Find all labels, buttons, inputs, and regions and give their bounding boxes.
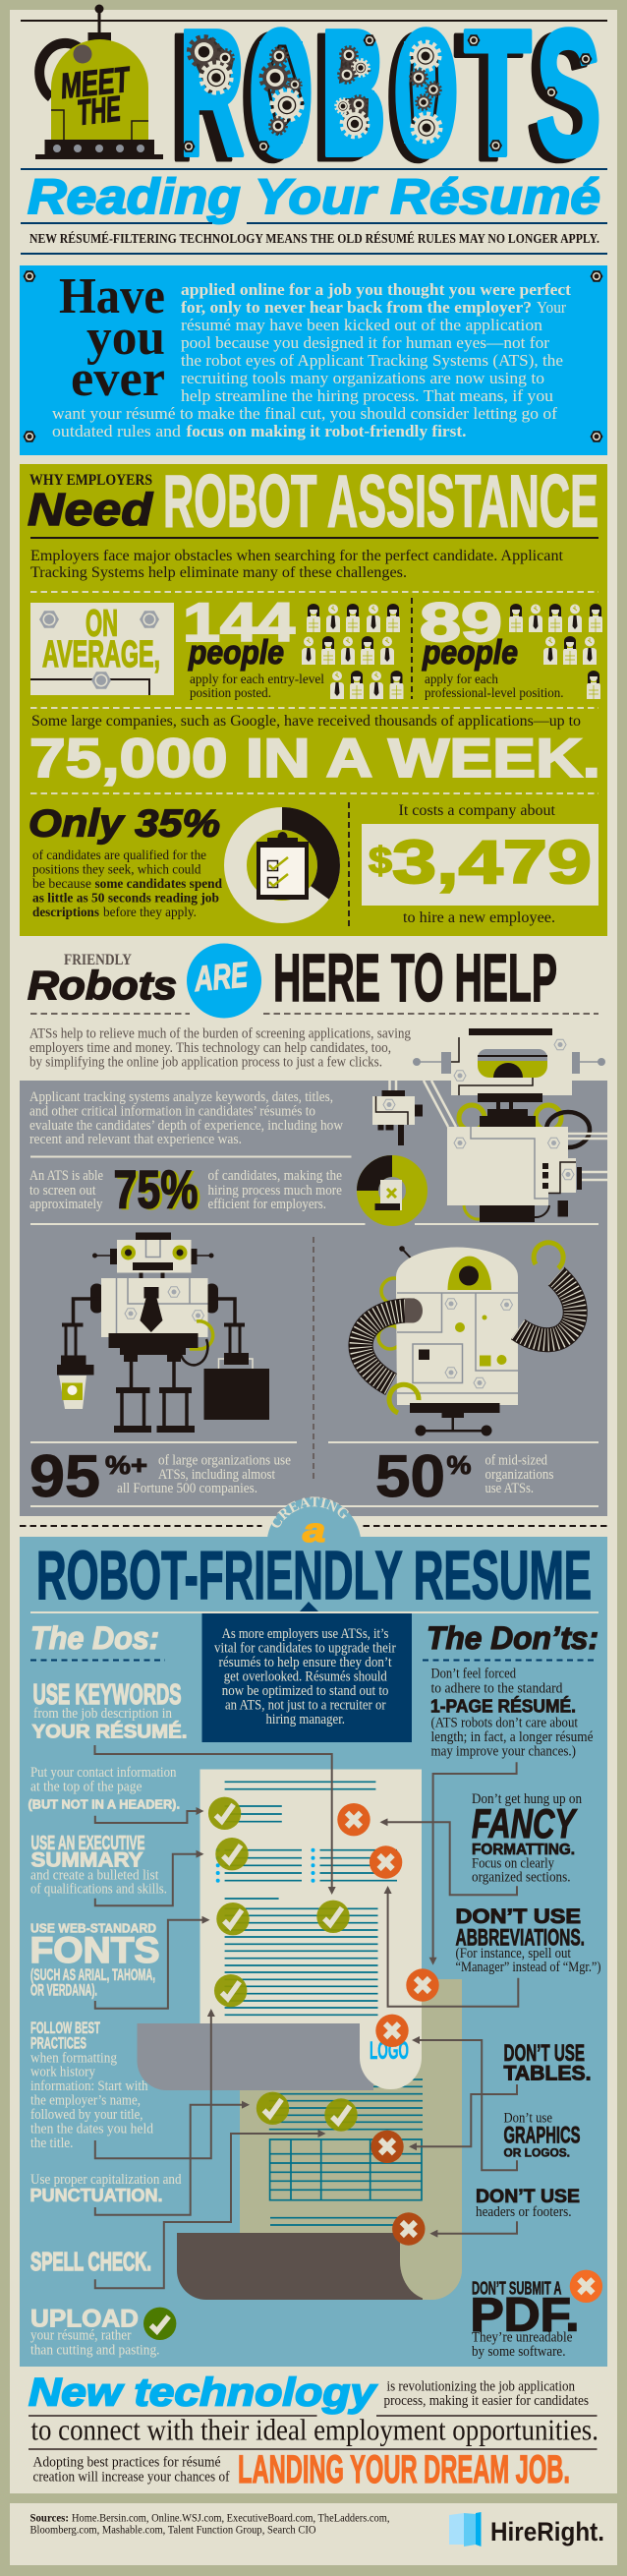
arrows: tips to resume (94, 1745, 518, 2288)
column: don'ts (430, 1666, 601, 2360)
tip: executive summary: of qualifications and skills. (30, 1882, 167, 1898)
stat: 75% screened out: efficient for employers. (208, 1197, 326, 1212)
heading: Have you ever: you (86, 310, 165, 366)
stat: only 35%: positions they seek, which could (32, 863, 200, 877)
text block: ATSs help (29, 1026, 411, 1070)
conclusion (28, 2371, 598, 2491)
text block: intro paragraph: for, only to never hear back from the employer? (181, 298, 532, 317)
callout: navy intro box: an ATS, not just to a recruiter or (225, 1697, 386, 1713)
tip: punctuation: PUNCTUATION. (29, 2186, 163, 2205)
tip: upload: UPLOAD (30, 2305, 139, 2332)
stat: only 35%: descriptions (32, 906, 100, 920)
icons: 89 people pictogram (509, 604, 602, 699)
text block: obstacles: Employers face major obstacles when searching for the perfect candidate. Applicant (30, 548, 564, 564)
text block: intro paragraph: Your (537, 298, 566, 317)
title: ROBOTS: R (170, 0, 233, 198)
tip: follow best practices: work history (30, 2065, 96, 2080)
icon: robot dome with Meet the: MEET (59, 59, 134, 106)
tip: page length: length; in fact, a longer résumé (430, 1729, 594, 1745)
stat: 75% screened out: 75% (116, 1160, 200, 1221)
callout: navy intro box: résumés to help ensure they don’t (218, 1655, 392, 1670)
callout: navy intro box: vital for candidates to upgrade their (214, 1640, 396, 1656)
title: ROBOTS: O (386, 0, 449, 198)
callout: on average sign: ON (86, 604, 118, 645)
tip: headers: headers or footers. (476, 2204, 572, 2220)
stat: only 35%: as little as 50 seconds reading job (32, 891, 219, 907)
tip: executive summary: SUMMARY (31, 1848, 143, 1872)
stat: only 35%: Only 35% (28, 802, 220, 846)
tip: web-standard fonts: OR VERDANA). (30, 1980, 97, 2000)
stat: 89 people: apply for each (425, 673, 498, 687)
heading: New technology: New technology (28, 2371, 377, 2415)
tip: pdf (470, 2279, 580, 2360)
stat: 95%+: %+ (105, 1450, 147, 1480)
stat: 95%+ (29, 1443, 291, 1509)
stat: 50%: 50 (375, 1443, 445, 1509)
tip: page length: to adhere to the standard (430, 1681, 563, 1697)
text block: intro paragraph: help streamline the hiring process. That means, if you (181, 386, 553, 405)
tip: follow best practices: then the dates you held (30, 2122, 154, 2137)
panel: grey robots section (20, 1028, 607, 1516)
stat: 75% screened out: approximately (29, 1197, 103, 1212)
callout: cost per hire (362, 802, 598, 926)
tip: follow best practices: the employer’s name, (30, 2092, 141, 2108)
icon: robot dome with Meet the (35, 4, 163, 159)
title: ROBOTS: B (313, 0, 377, 198)
stat: 50%: of mid-sized (485, 1453, 548, 1469)
tip: tables: TABLES. (503, 2063, 592, 2084)
tip: spell check: SPELL CHECK. (30, 2247, 151, 2276)
icon: robot top right (413, 1028, 607, 1222)
tip: executive summary: and create a bulleted list (30, 1868, 159, 1884)
tip: abbreviations: “Manager” instead of “Mgr.”) (456, 1960, 601, 1975)
text block: ATS analyze: evaluate the candidates’ depth of experience, including how (29, 1118, 343, 1134)
tip: follow best practices: PRACTICES (30, 2033, 86, 2053)
heading: Have you ever (59, 268, 165, 407)
tip: follow best practices: followed by your title, (30, 2107, 143, 2123)
tip: web-standard fonts (29, 1921, 159, 2000)
tip: fancy formatting (472, 1791, 583, 1886)
tip: punctuation: Use proper capitalization and (30, 2172, 182, 2188)
sources: Bloomberg.com, Mashable.com, Talent Function Group, Search CIO (29, 2523, 316, 2537)
tip: abbreviations (456, 1905, 601, 1975)
stat: 75% screened out (29, 1158, 342, 1221)
stat: only 35%: before they apply. (103, 906, 197, 920)
tip: follow best practices: FOLLOW BEST (30, 2019, 100, 2037)
title: ROBOTS: O (241, 0, 304, 198)
stat: only 35%: of candidates are qualified for the (32, 849, 206, 863)
tip: web-standard fonts: (SUCH AS ARIAL, TAHOMA, (30, 1965, 155, 1984)
sources: Sources: (29, 2511, 69, 2525)
text block: ATS analyze: recent and relevant that experience was. (29, 1132, 242, 1147)
heading: Friendly robots are here to help: Robots (28, 963, 177, 1008)
footer (29, 2511, 604, 2547)
header: Meet the Robots (35, 0, 601, 198)
panel: robot-friendly resume (20, 1496, 607, 2367)
tip: use keywords: YOUR RÉSUMÉ. (31, 1721, 187, 1742)
icon: logo placeholder: LOGO (370, 2037, 409, 2065)
tip: upload (30, 2305, 159, 2358)
callout: cost per hire: 3,479 (392, 829, 592, 897)
tip: tables (503, 2040, 592, 2084)
tip: page length: may improve your chances.) (430, 1744, 576, 1760)
tip: page length (430, 1666, 594, 1760)
tip: page length: Don’t feel forced (430, 1666, 517, 1681)
stat: 144 people: position posted. (190, 686, 271, 701)
heading: Creating a (271, 1496, 349, 1550)
tip: fancy formatting: organized sections. (472, 1870, 570, 1886)
text block: intro paragraph: pool because you designed it for human eyes—not for (181, 333, 550, 352)
stat: 144 people: people (188, 634, 284, 672)
tip: follow best practices: when formatting (30, 2051, 117, 2067)
text: adopting best practices: Adopting best practices for résumé (33, 2454, 220, 2470)
tip: upload: than cutting and pasting. (30, 2342, 159, 2358)
tip: contact information: (BUT NOT IN A HEADER). (28, 1797, 180, 1811)
tip: pdf: PDF. (470, 2289, 580, 2342)
text block: ATS analyze: and other critical information in candidates’ résumés to (29, 1103, 315, 1119)
text block: intro paragraph: the robot eyes of Applicant Tracking Systems (ATS), the (181, 351, 563, 370)
callout: navy intro box: get overlooked. Résumés should (224, 1669, 387, 1685)
tip: graphics: OR LOGOS. (503, 2145, 570, 2159)
stat: 75,000 in a week: 75,000 IN A WEEK. (29, 727, 600, 789)
tip: page length: 1-PAGE RÉSUMÉ. (430, 1695, 576, 1717)
text block: intro paragraph: outdated rules and (52, 422, 182, 440)
callout: cost per hire: to hire a new employee. (403, 909, 555, 926)
stat: 95%+: 95 (29, 1443, 100, 1509)
heading: Friendly robots are here to help: FRIENDLY (64, 952, 132, 968)
tip: graphics (503, 2110, 580, 2159)
tip: upload: your résumé, rather (30, 2328, 132, 2344)
column: dos (28, 1679, 187, 2358)
stat: 144 people: 144 (183, 591, 295, 653)
tip: headers: DON’T USE (476, 2187, 580, 2207)
heading: Creating a: a (303, 1512, 325, 1550)
callout: on average sign: AVERAGE, (42, 634, 160, 675)
heading: Friendly robots are here to help (28, 940, 598, 1019)
icon: robot with tie and briefcase (57, 1233, 269, 1433)
stat: only 35% (28, 802, 222, 920)
panel: why employers need robot assistance (20, 460, 607, 936)
heading: Why employers need: Need (28, 484, 153, 535)
tip: fancy formatting: Don’t get hung up on (472, 1791, 583, 1807)
text: large companies: Some large companies, such as Google, have received thousands of applications—up to (31, 713, 581, 730)
text: revolutionizing: is revolutionizing the job application (387, 2379, 576, 2395)
tip: page length: (ATS robots don’t care about (430, 1715, 578, 1730)
heading: Why employers need: WHY EMPLOYERS (29, 472, 152, 489)
stat: 50%: use ATSs. (485, 1481, 534, 1496)
tip: contact information: Put your contact information (30, 1765, 177, 1781)
heading: Have you ever: Have (59, 268, 165, 324)
tip: fancy formatting: FORMATTING. (472, 1842, 575, 1858)
text block: intro paragraph: want your résumé to make the final cut, you should consider letting go of (52, 404, 558, 423)
text: revolutionizing (383, 2379, 589, 2409)
text block: ATSs help: by simplifying the online job application process to just a few clicks. (29, 1054, 382, 1070)
stat: 144 people: apply for each entry-level (190, 673, 324, 687)
callout: navy intro box: As more employers use ATSs, it’s (222, 1626, 389, 1642)
stat: 95%+: of large organizations use (158, 1453, 291, 1469)
callout: cost per hire: It costs a company about (399, 802, 556, 819)
tip: pdf: by some software. (472, 2344, 566, 2360)
heading: Creating a: CREATING (271, 1496, 349, 1528)
tip: use keywords (31, 1679, 187, 1742)
tip: graphics: GRAPHICS (503, 2122, 580, 2149)
tip: fancy formatting: FANCY (472, 1800, 578, 1846)
tip: contact information (28, 1765, 180, 1811)
stat: 75% screened out: hiring process much more (208, 1183, 342, 1199)
stat: only 35%: be because (32, 877, 91, 892)
tip: follow best practices: information: Start with (30, 2078, 148, 2094)
tip: web-standard fonts: FONTS (29, 1930, 159, 1970)
text: revolutionizing: process, making it easier for candidates (383, 2393, 589, 2409)
callout: on average sign (30, 603, 174, 695)
stat: 75% screened out: 75% (114, 1158, 199, 1219)
tip: abbreviations: (For instance, spell out (456, 1946, 571, 1961)
stat: 95%+: all Fortune 500 companies. (117, 1481, 257, 1496)
text block: ATSs help: ATSs help to relieve much of the burden of screening applications, saving (29, 1026, 411, 1042)
stat: 95%+: ATSs, including almost (158, 1467, 275, 1483)
heading: The Don'ts: The Don’ts: (427, 1620, 598, 1656)
text block: intro paragraph: applied online for a job you thought you were perfect (181, 280, 572, 299)
stat: 75% screened out: of candidates, making the (208, 1168, 342, 1184)
stat: only 35%: some candidates spend (94, 877, 222, 892)
chart: 75% donut (368, 1166, 417, 1215)
icons: 144 people pictogram (302, 604, 403, 699)
panel: Have you ever intro (20, 265, 607, 455)
stat: 144 people (183, 591, 324, 701)
tip: contact information: at the top of the page (30, 1780, 142, 1795)
text block: intro paragraph: recruiting tools many organizations are now using to (181, 369, 544, 387)
logo: HireRight: HireRight. (490, 2517, 604, 2547)
text block: ATS analyze (29, 1089, 343, 1147)
icon: upload check (143, 2308, 176, 2340)
tip: abbreviations: DON’T USE (456, 1905, 581, 1928)
heading: The Dos: The Dos: (30, 1620, 159, 1656)
resume illustration (138, 1770, 462, 2300)
callout: navy intro box: now be optimized to stand out to (222, 1683, 388, 1699)
icon: dome robot with tubes (361, 1243, 575, 1435)
text block: obstacles: Tracking Systems help eliminate many of these challenges. (30, 564, 407, 581)
tip: follow best practices (30, 2019, 154, 2151)
callout: cost per hire: $ (369, 841, 392, 882)
logo: HireRight (449, 2512, 604, 2547)
text block: intro paragraph: résumé may have been kicked out of the application (181, 316, 542, 334)
stat: 50%: % (446, 1450, 472, 1480)
sources (29, 2511, 389, 2537)
callout: navy intro box: hiring manager. (265, 1712, 345, 1727)
text block: ATSs help: employers time and money. This technology can help candidates, too, (29, 1040, 391, 1056)
title: ROBOTS (170, 0, 601, 198)
tip: fancy formatting: Focus on clearly (472, 1856, 555, 1872)
tip: executive summary: USE AN EXECUTIVE (31, 1833, 145, 1854)
text: adopting best practices (33, 2454, 230, 2486)
icons: check and cross markers (208, 1797, 602, 2303)
text block: intro paragraph: focus on making it robot-friendly first. (187, 422, 466, 440)
stat: 50%: organizations (485, 1467, 554, 1483)
tip: pdf: They’re unreadable (472, 2330, 572, 2346)
text block: obstacles (30, 548, 564, 581)
stat: 89 people: people (422, 634, 518, 672)
text block: intro paragraph (52, 280, 572, 440)
stat: 75% screened out: An ATS is able (29, 1168, 103, 1184)
icon: robot dome with Meet the: THE (76, 88, 123, 133)
tip: follow best practices: the title. (30, 2136, 73, 2151)
title: Reading Your Résumé: Reading Your Résumé (28, 169, 600, 224)
chart: 35% donut with clipboard (236, 818, 328, 912)
stat: 89 people: 89 (420, 591, 502, 653)
title: ROBOTS: T (454, 0, 523, 198)
text: adopting best practices: creation will increase your chances of (33, 2470, 230, 2486)
tip: web-standard fonts: USE WEB-STANDARD (30, 1921, 156, 1935)
stat: 89 people (420, 591, 564, 701)
tip: punctuation (29, 2172, 182, 2205)
tip: executive summary (30, 1833, 167, 1898)
tip: graphics: Don’t use (503, 2110, 552, 2126)
tip: headers (476, 2187, 580, 2220)
callout: navy intro box (202, 1613, 412, 1742)
stat: 89 people: professional-level position. (425, 686, 564, 701)
heading: Friendly robots are here to help: ARE (192, 954, 250, 999)
text block: ATS analyze: Applicant tracking systems analyze keywords, dates, titles, (29, 1089, 333, 1105)
tip: use keywords: from the job description in (33, 1706, 173, 1722)
tip: pdf: DON’T SUBMIT A (472, 2279, 562, 2299)
stat: 50% (375, 1443, 554, 1509)
stat: 75% screened out: to screen out (29, 1183, 96, 1199)
icon: robot hand (372, 1081, 423, 1145)
heading: Have you ever: ever (71, 351, 165, 407)
sources: Home.Bersin.com, Online.WSJ.com, ExecutiveBoard.com, TheLadders.com, (72, 2511, 389, 2525)
tip: use keywords: USE KEYWORDS (33, 1679, 181, 1711)
